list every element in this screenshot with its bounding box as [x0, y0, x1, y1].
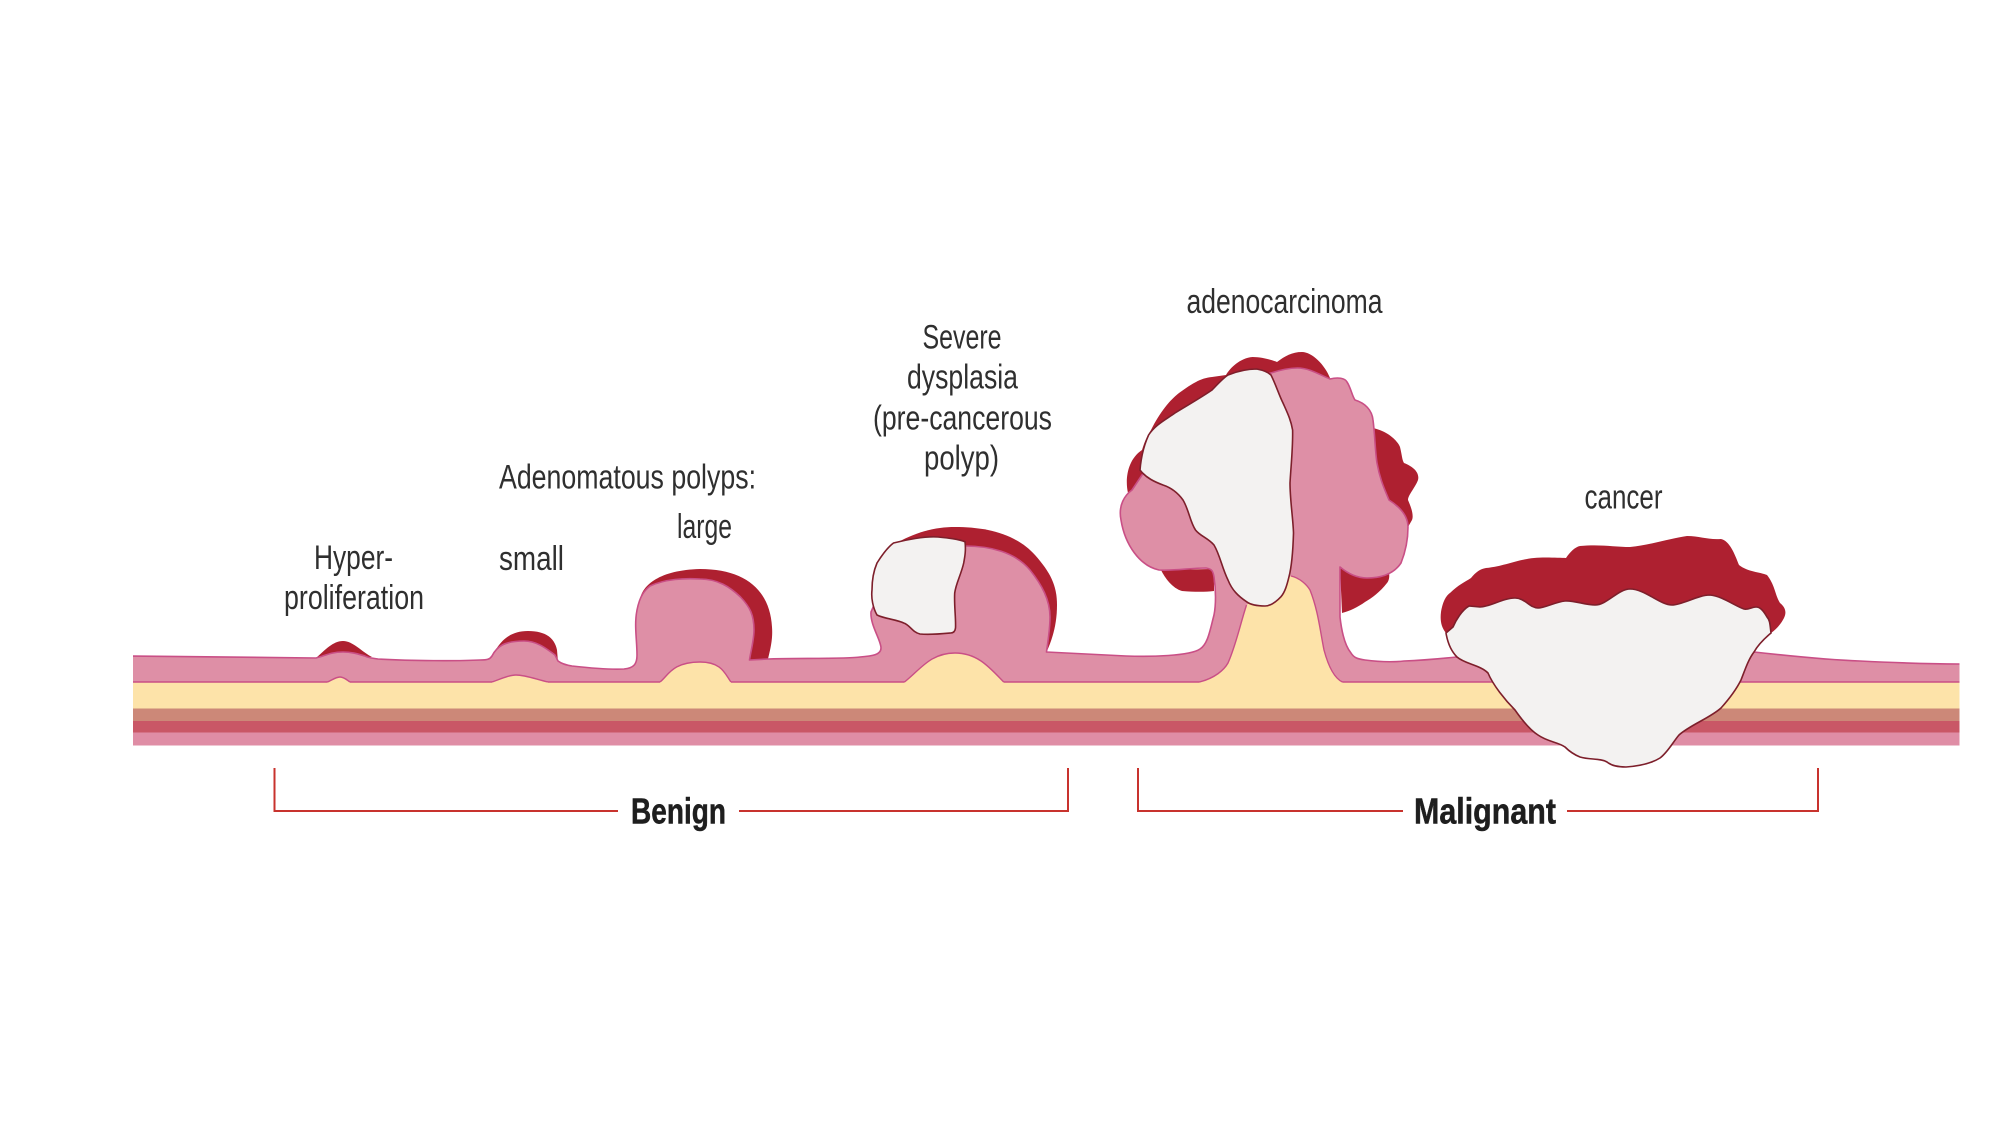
label: severe dysplasia: (pre-cancerous [873, 400, 1052, 438]
label: hyper-proliferation: Hyper- [314, 539, 393, 577]
submucosa and muscle layers [133, 680, 1960, 746]
heading: benign: Benign [631, 790, 726, 832]
diagram: colon wall cross-section [128, 352, 1964, 767]
label: hyper-proliferation [284, 539, 424, 617]
bracket: benign [274, 768, 1068, 832]
yellow tissue bumps [328, 576, 1342, 684]
polyp dark red caps [316, 352, 1418, 662]
label: severe dysplasia: Severe [922, 318, 1002, 356]
label: hyper-proliferation: proliferation [284, 579, 424, 617]
label: adenocarcinoma: adenocarcinoma [1186, 283, 1383, 321]
bracket: malignant [1138, 768, 1818, 832]
label: cancer: cancer [1584, 478, 1662, 516]
cancer dark red cap [1441, 536, 1785, 633]
label: severe dysplasia [873, 318, 1052, 478]
label: severe dysplasia: polyp) [924, 440, 999, 478]
label: large: large [677, 508, 732, 546]
heading: malignant: Malignant [1414, 790, 1556, 832]
mucosa layer with polyps [128, 368, 1964, 682]
label: severe dysplasia: dysplasia [907, 358, 1019, 396]
label: small: small [499, 540, 564, 578]
tumour: adenocarcinoma [1140, 369, 1294, 606]
tumour: severe dysplasia [872, 537, 965, 634]
label: adenomatous polyps: Adenomatous polyps: [499, 458, 756, 496]
tumour: invasive cancer [1446, 589, 1771, 767]
